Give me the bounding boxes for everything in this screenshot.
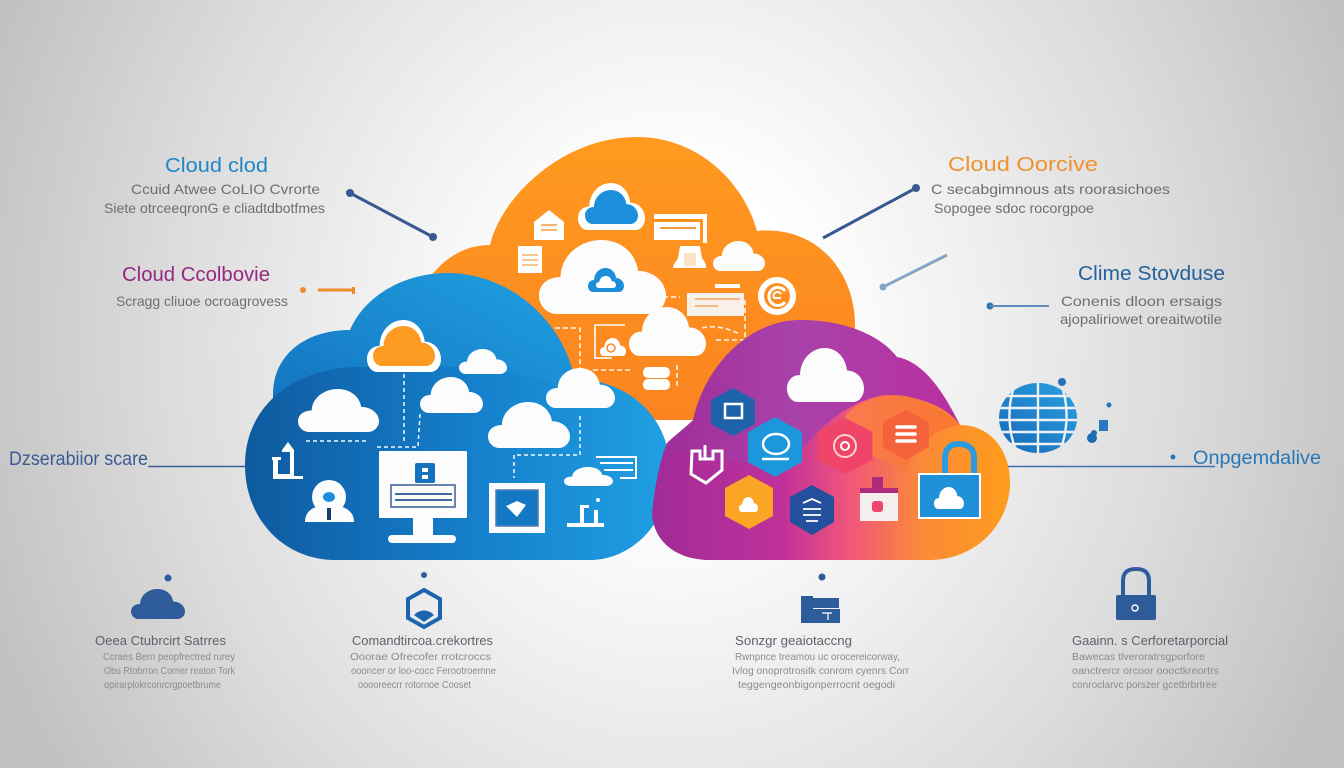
icon: shield: [691, 445, 722, 483]
description: [350, 651, 496, 691]
callout: middle left: [116, 264, 288, 309]
icon: cloud with lines: [564, 457, 636, 486]
icon: box: [860, 477, 898, 521]
icon: stacked blob: [643, 367, 670, 390]
icon: lock: [1116, 569, 1156, 620]
gradient lower cloud: [652, 395, 1010, 560]
orange hump: [835, 395, 960, 470]
arrow: orange connector: [300, 287, 355, 294]
arrow: top right connector: [823, 184, 920, 238]
icon: white cloud right: [713, 241, 765, 271]
icon: framed tablet: [489, 483, 545, 533]
icon: orange hexagon: [725, 475, 773, 529]
heading: Comandtircoa.crekortres: [352, 633, 493, 648]
icon: document: [518, 246, 542, 273]
heading: Clime Stovduse: [1078, 263, 1225, 285]
blue back cloud shape: [273, 273, 573, 430]
arrow: lower right line: [1008, 454, 1215, 466]
heading: Oeea Ctubrcirt Satrres: [95, 633, 227, 648]
description: Scragg cliuoe ocroagrovess: [116, 293, 288, 309]
description: ooooreecrr rotornoe Cooset: [358, 679, 471, 691]
description: teggengeonbigonperrocnt oegodi: [738, 679, 895, 691]
panel: bottom item 4: [1072, 569, 1228, 691]
description: Bawecas tlveroratrsgporfore: [1072, 651, 1205, 663]
icon: padlock: [919, 444, 980, 518]
description: conroclarvc porszer gcetbrbrtree: [1072, 679, 1217, 691]
icon: person: [305, 480, 354, 522]
description: [1072, 651, 1219, 691]
icon: framed badge: [595, 325, 626, 358]
arrow: lower left line: [148, 466, 246, 468]
panel: orange cloud: [432, 137, 855, 420]
description: C secabgimnous ats roorasichoes: [931, 181, 1170, 197]
icon: orange-red hexagon: [883, 410, 929, 460]
description: oanctrercr orcoor oooctkreortrs: [1072, 665, 1219, 677]
arrow: middle right connector: [986, 302, 1049, 310]
description: Ccuid Atwee CoLIO Cvrorte: [131, 181, 320, 197]
panel: blue cloud: [245, 273, 670, 560]
heading: Gaainn. s Cerforetarporcial: [1072, 633, 1228, 648]
description: Conenis dloon ersaigs: [1061, 293, 1222, 309]
panel: bottom item 2: [350, 572, 496, 691]
description line 2: ajopaliriowet oreaitwotile: [1060, 311, 1222, 327]
description: Ooorae Ofrecofer rrotcroccs: [350, 651, 491, 663]
description: Rwnpnce treamou uc orocereicorway,: [735, 651, 900, 663]
icon: red hexagon: [818, 418, 872, 474]
heading: Sonzgr geaiotaccng: [735, 633, 852, 648]
icon: monitor: [379, 451, 467, 543]
dashed connectors: [306, 374, 580, 478]
purple cloud shape: [652, 320, 960, 515]
callout: lower right label: Onpgemdalive: [1193, 448, 1321, 469]
orange cloud shape: [432, 137, 855, 420]
callout: lower left label: Dzserabiior scare: [9, 449, 148, 470]
panel: bottom item 3: [732, 574, 909, 691]
description: Ccraes Bern peopfrectred rurey: [103, 651, 236, 663]
callout: top left: [104, 155, 325, 216]
panel: bottom item 1: [95, 574, 236, 691]
icon: small glyph: [567, 498, 604, 527]
icon: dark blue hexagon: [711, 388, 755, 436]
icon: orange cloud: [367, 320, 441, 372]
callout: top right: [931, 154, 1170, 216]
description line 2: Sopogee sdoc rocorgpoe: [934, 200, 1094, 216]
description: Ivlog onoprotrositk conrom cyenrs Corr: [732, 665, 909, 677]
heading: Cloud Ccolbovie: [122, 264, 270, 286]
icon: clouds: [298, 349, 615, 448]
dashed connectors: [555, 297, 745, 388]
heading: Cloud Oorcive: [948, 154, 1098, 176]
icon: white cloud lower: [629, 307, 706, 356]
arrow: top left connector: [346, 189, 437, 241]
icon: large white cloud: [539, 240, 666, 314]
icon: form card: [687, 284, 744, 316]
description: [103, 651, 236, 691]
icon: card: [654, 214, 707, 243]
arrow: light connector: [880, 255, 947, 290]
blue front cloud shape: [245, 366, 670, 560]
icon: hexagon: [408, 572, 440, 627]
icon: globe: [999, 378, 1112, 454]
description: Obu Rtobrron Corner reaton Tork: [104, 665, 236, 677]
description: opirarplokrconrcrgpoetbrume: [104, 679, 221, 691]
icon: circled C: [761, 280, 793, 312]
description line 2: Siete otrceeqronG e cliadtdbotfmes: [104, 200, 325, 216]
description: [732, 651, 909, 691]
icon: cloud: [131, 574, 185, 619]
icon: building: [272, 442, 303, 479]
icon: envelope: [534, 210, 564, 240]
panel: purple cloud: [652, 320, 1010, 560]
callout: middle right: [1060, 263, 1225, 327]
icon: suitcase: [801, 574, 840, 623]
icon: small device: [673, 246, 706, 268]
icon: navy hexagon: [790, 485, 834, 535]
icon: white cloud: [787, 348, 864, 402]
icon: blue cloud: [578, 183, 645, 230]
heading: Cloud clod: [165, 155, 268, 177]
icon: bright blue hexagon: [748, 417, 802, 477]
description: oooncer or loo-cocc Ferootroemne: [351, 665, 496, 677]
